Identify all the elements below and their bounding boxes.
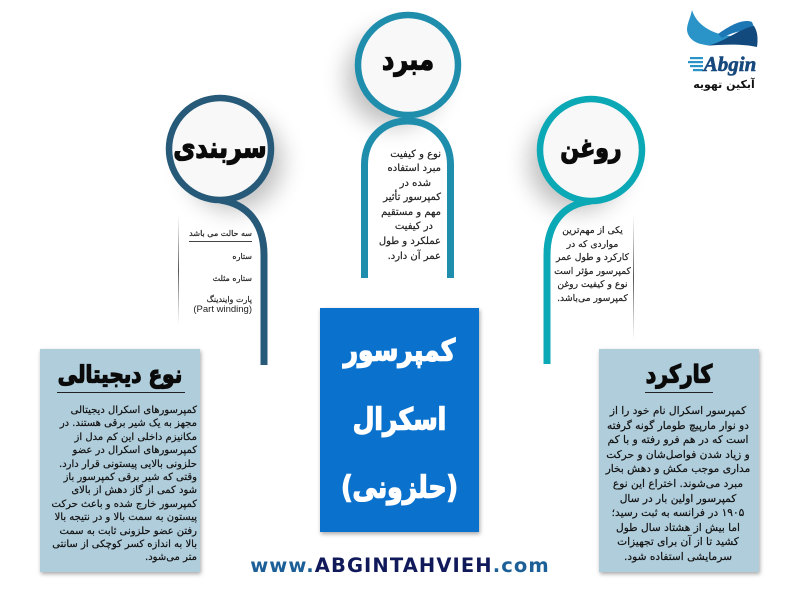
text block: operation: کمپرسور اسکرال نام خود را از [610, 405, 746, 417]
text block: operation: دو نوار مارپیچ طومار گونه گرفته [607, 420, 749, 432]
title line 2: اسکرال [353, 402, 446, 437]
text block: sarbandi: سه حالت می باشد [189, 229, 252, 238]
text block: operation: کمپرسور اولین بار در سال [620, 493, 736, 505]
logo persian name: آبکین تهویه [693, 77, 755, 91]
text block: roghan: مواردی که در [567, 239, 618, 250]
text block: digital type: مجهز به یک شیر برقی هستند. در [60, 418, 197, 429]
text block: roghan: کمپرسور می‌باشد. [557, 293, 628, 304]
text block: mobarred: کمپرسور تأثیر [383, 192, 441, 203]
text block: operation: اما بیش از هشتاد سال طول [616, 522, 740, 534]
circle: mobarred [358, 15, 458, 115]
text block: mobarred: عمر آن دارد. [388, 251, 441, 262]
text block: operation: ۱۹۰۵ در فرانسه به ثبت رسید؛ [612, 507, 744, 519]
text block: sarbandi: (Part winding) [193, 304, 252, 315]
shadow: circle sarbandi [186, 114, 282, 210]
logo wave light [687, 10, 732, 45]
text block: digital type: کمپرسور خارج شده و باعث حرکت [52, 499, 197, 510]
panel: operation [599, 349, 759, 572]
text block: sarbandi [189, 229, 252, 315]
text block: digital type: حلزونی بالایی پیستونی قرار دارد. [59, 459, 197, 470]
tail: sarbandi [220, 200, 264, 365]
logo [687, 10, 758, 91]
text block: sarbandi: ستاره مثلث [213, 274, 252, 283]
text block: roghan: یکی از مهم‌ترین [562, 225, 623, 236]
tail: mobarred [364, 121, 450, 278]
text block: digital type [52, 405, 198, 563]
text block: mobarred: در کیفیت [395, 221, 433, 232]
panel: digital type [40, 349, 200, 572]
text block: operation [605, 405, 750, 563]
text block: operation: و زیاد شدن فواصل‌شان و حرکت [606, 449, 750, 461]
text block: digital type: بالا به اندازه کسر کوچکی از سانتی [52, 539, 197, 550]
text block: operation: سرمایشی استفاده شود. [624, 551, 732, 563]
text block: digital type: شود کمی از گاز دهش از بالای [71, 485, 197, 496]
shadow: circle mobarred [346, 30, 442, 126]
tail: roghan [547, 201, 591, 364]
text block: mobarred: نوع و کیفیت [390, 148, 441, 160]
text block: roghan: کارکرد و طول عمر [556, 252, 629, 263]
panel: main title [320, 308, 479, 532]
text block: digital type: وقتی که شیر برقی کمپرسور باز [64, 472, 197, 483]
circle: roghan [540, 99, 642, 201]
text block: digital type: مکانیزم داخلی این کم مدل از [75, 432, 197, 443]
text block: operation: مبرد می‌شوند. اختراع این نوع [613, 478, 743, 490]
heading: sarbandi: سربندی [173, 131, 267, 165]
text block: operation: است که در هم فرو رفته و با کم [608, 434, 748, 446]
text block: digital type: پیستون به سمت بالا و در نتیجه بالا [55, 512, 197, 523]
heading underline [645, 392, 713, 393]
text block: mobarred: شده در [400, 178, 431, 189]
divider right [633, 215, 634, 340]
text block: roghan: کمپرسور مؤثر است [554, 266, 631, 277]
logo flame [688, 57, 703, 71]
text block: operation: کشید تا از آن برای تجهیزات [617, 536, 739, 548]
logo wave mid [718, 21, 756, 38]
heading: digital type: نوع دیجیتالی [58, 360, 182, 388]
heading: operation: کارکرد [646, 360, 712, 388]
title line 3: (حلزونی) [341, 470, 458, 505]
title line 1: کمپرسور [344, 333, 455, 368]
text block: digital type: کمپرسورهای اسکرال در عضو [73, 445, 197, 456]
text block: roghan: نوع و کیفیت روغن [557, 279, 628, 290]
text block: mobarred: مهم و مستقیم [381, 207, 441, 218]
text block: sarbandi: پارت وایندینگ [207, 295, 252, 304]
website address: www.ABGINTAHVIEH.com [250, 554, 550, 577]
text block: mobarred: مبرد استفاده [388, 163, 441, 174]
text block: mobarred [379, 148, 442, 262]
text block: mobarred: عملکرد و طول [379, 236, 441, 247]
heading: roghan: روغن [560, 134, 622, 164]
text block: digital type: کمپرسورهای اسکرال دیجیتالی [71, 405, 197, 416]
circle: sarbandi [169, 98, 271, 200]
heading: mobarred: مبرد [382, 43, 434, 77]
text block: roghan [554, 225, 631, 304]
text block: digital type: رفتن عضو حلزونی ثابت به سمت [60, 526, 197, 537]
heading underline [57, 392, 185, 393]
logo wave dark [705, 26, 758, 47]
text block: digital type: متر می‌شود. [145, 552, 197, 563]
shadow: circle roghan [529, 115, 625, 211]
logo wordmark: Abgin [702, 52, 756, 76]
text block: operation: مداری موجب مکش و دهش بخار [606, 463, 750, 475]
divider left [178, 215, 179, 325]
text block: sarbandi: ستاره [232, 252, 252, 261]
